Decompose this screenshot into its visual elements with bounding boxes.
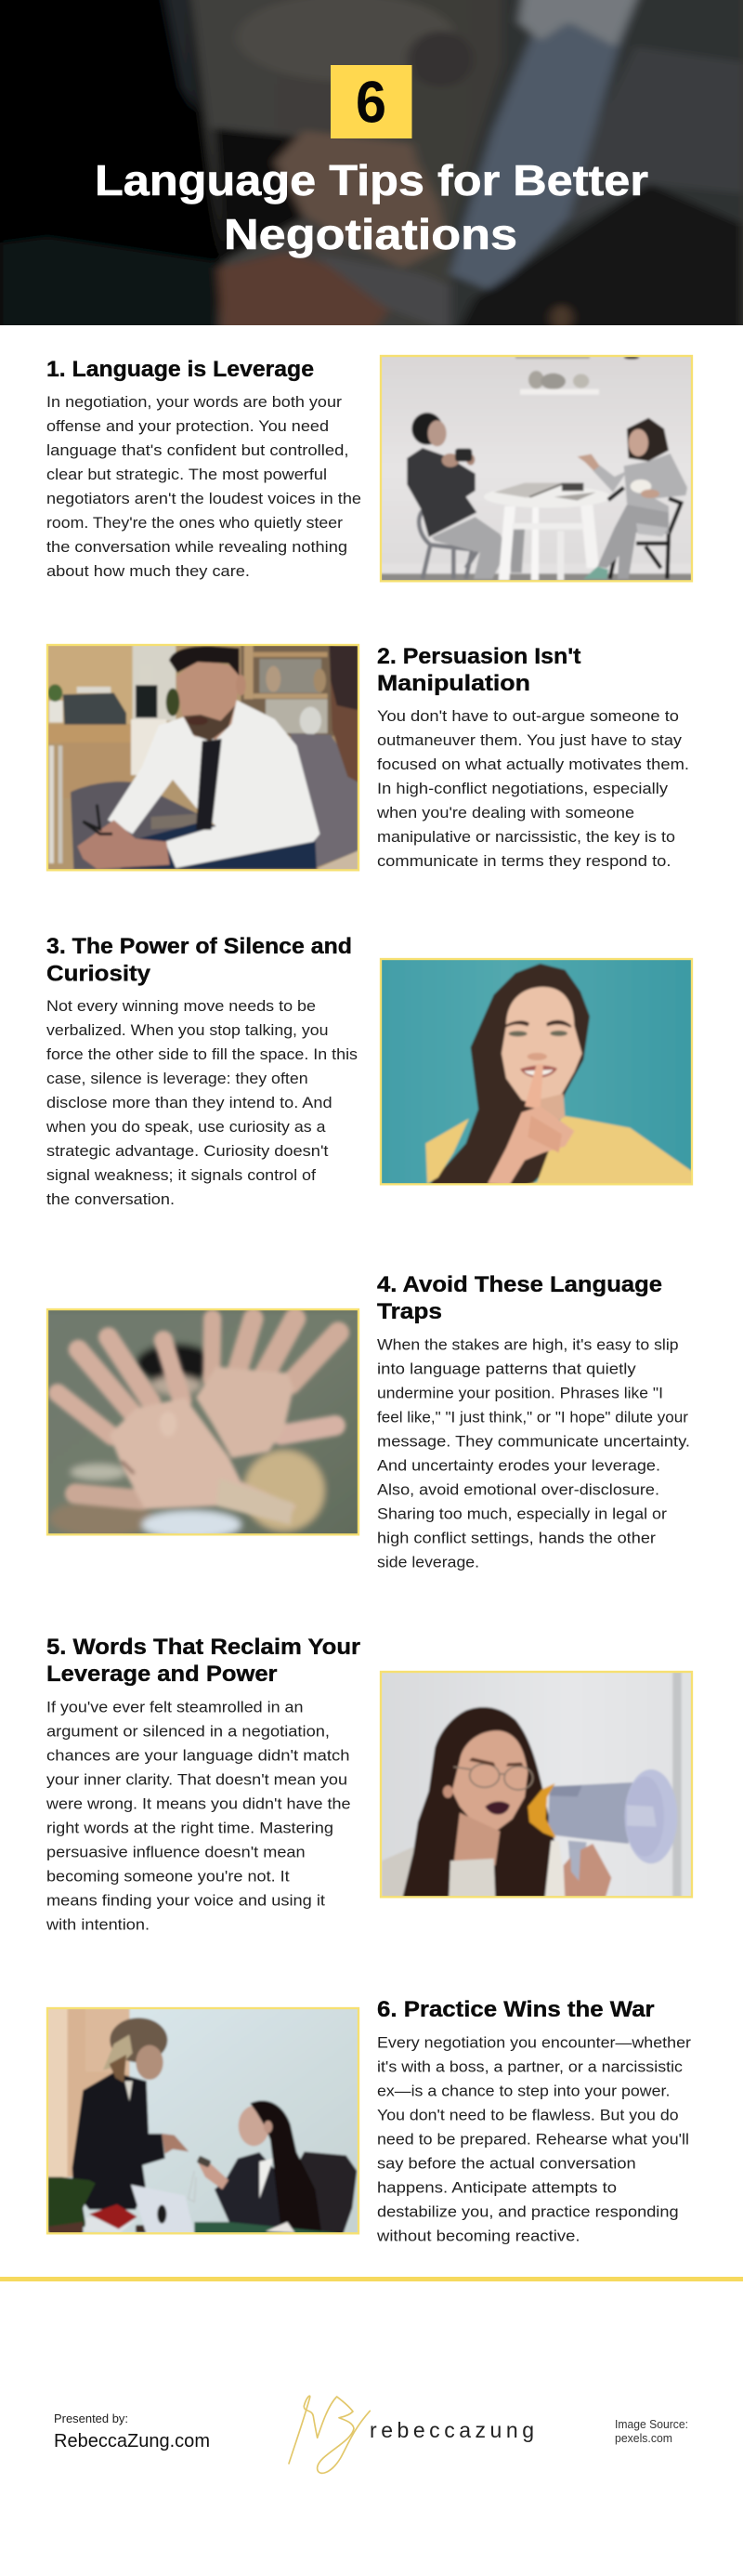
text block: tip 1: room. They're the ones who quietly steer <box>46 514 343 532</box>
header photo: handshake of two business people, darkened <box>0 0 743 339</box>
presented by: Presented by: <box>54 2412 128 2425</box>
text block: tip 4: And uncertainty erodes your leverage. <box>377 1457 660 1474</box>
panel: tip 2 <box>43 640 689 875</box>
text block: tip 2: focused on what actually motivates them. <box>377 756 689 773</box>
panel: tip 1 <box>46 351 698 586</box>
text block: tip 5: means finding your voice and using it <box>46 1891 325 1909</box>
text block: tip 2: You don't have to out-argue someone to <box>377 707 679 725</box>
text block: tip 6: without becoming reactive. <box>376 2227 580 2245</box>
text block: tip 4: Sharing too much, especially in legal or <box>377 1505 667 1522</box>
number badge: 6 <box>356 71 386 136</box>
text block: tip 1: the conversation while revealing nothing <box>46 538 347 556</box>
presented by <box>54 2412 210 2451</box>
text block: tip 3: verbalized. When you stop talking, you <box>46 1021 329 1039</box>
number badge <box>331 65 412 138</box>
text block: tip 5: becoming someone you're not. It <box>46 1867 290 1885</box>
photo: two women in an office, one pointing <box>43 2004 365 2239</box>
chair <box>297 2150 358 2232</box>
presented by: RebeccaZung.com <box>54 2431 210 2451</box>
heading: tip 3: Curiosity <box>46 961 151 987</box>
text block: tip 6: it's with a boss, a partner, or a narcissistic <box>377 2057 684 2076</box>
panel: tip 3 <box>46 934 698 1208</box>
text block: tip 4: into language patterns that quietly <box>377 1360 636 1377</box>
logo: rebeccazung: rebeccazung <box>370 2418 534 2442</box>
man <box>120 823 317 870</box>
text block: tip 2 <box>376 707 689 870</box>
text block: tip 6: You don't need to be flawless. But you do <box>377 2106 679 2124</box>
text block: tip 3: case, silence is leverage: they often <box>46 1070 308 1087</box>
panel: footer <box>54 2396 688 2473</box>
text block: tip 3: strategic advantage. Curiosity doesn't <box>46 1142 329 1160</box>
photo: worried man in white shirt and tie <box>43 640 365 875</box>
text block: tip 4: side leverage. <box>377 1554 479 1571</box>
photo: two outstretched hands <box>46 1308 360 1535</box>
panel: tip 5 <box>46 1635 698 1933</box>
heading: tip 4 <box>377 1272 662 1324</box>
text block: tip 1: offense and your protection. You need <box>46 417 329 435</box>
heading: tip 3 <box>46 934 352 987</box>
panel: tip 4 <box>36 1272 690 1571</box>
heading: tip 2: Manipulation <box>377 671 530 696</box>
text block: tip 2: communicate in terms they respond to. <box>377 852 671 870</box>
photo: woman with finger to lips on teal background <box>376 954 698 1189</box>
heading: tip 2 <box>377 644 581 696</box>
left woman <box>72 2072 165 2210</box>
heading: tip 4: Traps <box>377 1299 442 1324</box>
text block: tip 3: disclose more than they intend to. And <box>46 1094 332 1111</box>
heading: tip 1: 1. Language is Leverage <box>46 357 314 382</box>
text block: tip 6 <box>376 2033 691 2245</box>
text block: tip 6: destabilize you, and practice responding <box>377 2202 679 2221</box>
title: Language Tips for Better <box>95 156 648 204</box>
logo: rebeccazung <box>289 2396 534 2473</box>
text block: tip 4: Also, avoid emotional over-disclosure. <box>377 1481 659 1498</box>
text block: tip 4: message. They communicate uncertainty. <box>377 1433 690 1450</box>
photo: woman with glasses speaking into a megaphone <box>376 1667 698 1902</box>
text block: tip 3: force the other side to fill the space. In this <box>46 1045 358 1063</box>
table <box>531 506 539 581</box>
text block: tip 1: negotiators aren't the loudest voices in the <box>46 490 361 507</box>
text block: tip 2: In high-conflict negotiations, especially <box>377 780 669 797</box>
text block: tip 5: If you've ever felt steamrolled in an <box>46 1698 303 1715</box>
heading: tip 5: 5. Words That Reclaim Your <box>46 1635 360 1660</box>
heading: tip 6: 6. Practice Wins the War <box>377 1997 655 2022</box>
title: Negotiations <box>224 210 517 258</box>
text block: tip 5: with intention. <box>46 1915 150 1933</box>
text block: tip 1: clear but strategic. The most powerful <box>46 466 327 483</box>
text block: tip 1: In negotiation, your words are both your <box>46 393 342 411</box>
photo: two women talking at a white table <box>376 351 698 586</box>
text block: tip 6: need to be prepared. Rehearse what you'll <box>377 2130 689 2149</box>
heading: tip 5: Leverage and Power <box>46 1662 277 1687</box>
text block: tip 6: say before the actual conversation <box>377 2154 636 2173</box>
text block: tip 5: argument or silenced in a negotiation, <box>46 1722 330 1740</box>
text block: tip 1: about how much they care. <box>46 562 250 580</box>
text block: tip 5: chances are your language didn't match <box>46 1746 349 1764</box>
text block: tip 1 <box>46 393 361 580</box>
text block: tip 5 <box>46 1698 351 1933</box>
text block: tip 5: your inner clarity. That doesn't mean you <box>46 1770 347 1788</box>
text block: tip 3: the conversation. <box>46 1190 175 1208</box>
right chair <box>608 488 681 579</box>
text block: tip 4: When the stakes are high, it's easy to slip <box>377 1336 679 1353</box>
image source: pexels.com <box>615 2432 672 2445</box>
text block: tip 3: Not every winning move needs to be <box>46 997 316 1015</box>
title <box>95 156 648 258</box>
text block: tip 3: signal weakness; it signals control of <box>46 1166 316 1184</box>
text block: tip 4: feel like," "I just think," or "I hope" dilute your <box>377 1409 688 1426</box>
right woman <box>214 2151 282 2228</box>
heading: tip 3: 3. The Power of Silence and <box>46 934 352 959</box>
foreground head <box>331 683 358 782</box>
text block: tip 3 <box>46 997 358 1208</box>
text block: tip 1: language that's confident but controlled, <box>46 441 349 459</box>
heading: tip 5 <box>46 1635 360 1687</box>
panel: tip 6 <box>43 1997 691 2245</box>
text block: tip 5: persuasive influence doesn't mean <box>46 1843 306 1860</box>
heading: tip 2: 2. Persuasion Isn't <box>377 644 581 669</box>
image source <box>615 2418 688 2445</box>
left chair <box>419 511 478 579</box>
image source: Image Source: <box>615 2418 688 2431</box>
text block: tip 2: when you're dealing with someone <box>376 804 634 821</box>
text block: tip 6: ex—is a chance to step into your power. <box>377 2082 670 2100</box>
right woman <box>623 453 688 513</box>
desk items <box>47 2177 96 2231</box>
text block: tip 6: happens. Anticipate attempts to <box>377 2178 617 2197</box>
text block: tip 6: Every negotiation you encounter—whether <box>377 2033 691 2052</box>
left woman <box>432 517 508 579</box>
text block: tip 4: undermine your position. Phrases like "I <box>377 1385 663 1401</box>
text block: tip 2: manipulative or narcissistic, the key is to <box>377 828 675 846</box>
heading: tip 4: 4. Avoid These Language <box>377 1272 662 1297</box>
text block: tip 5: right words at the right time. Mastering <box>46 1819 333 1836</box>
text block: tip 5: were wrong. It means you didn't have the <box>46 1794 351 1812</box>
text block: tip 2: outmaneuver them. You just have to stay <box>377 731 683 749</box>
text block: tip 4 <box>377 1336 690 1571</box>
text block: tip 4: high conflict settings, hands the other <box>377 1530 656 1546</box>
panel: header <box>0 0 743 339</box>
text block: tip 3: when you do speak, use curiosity as a <box>46 1118 326 1136</box>
